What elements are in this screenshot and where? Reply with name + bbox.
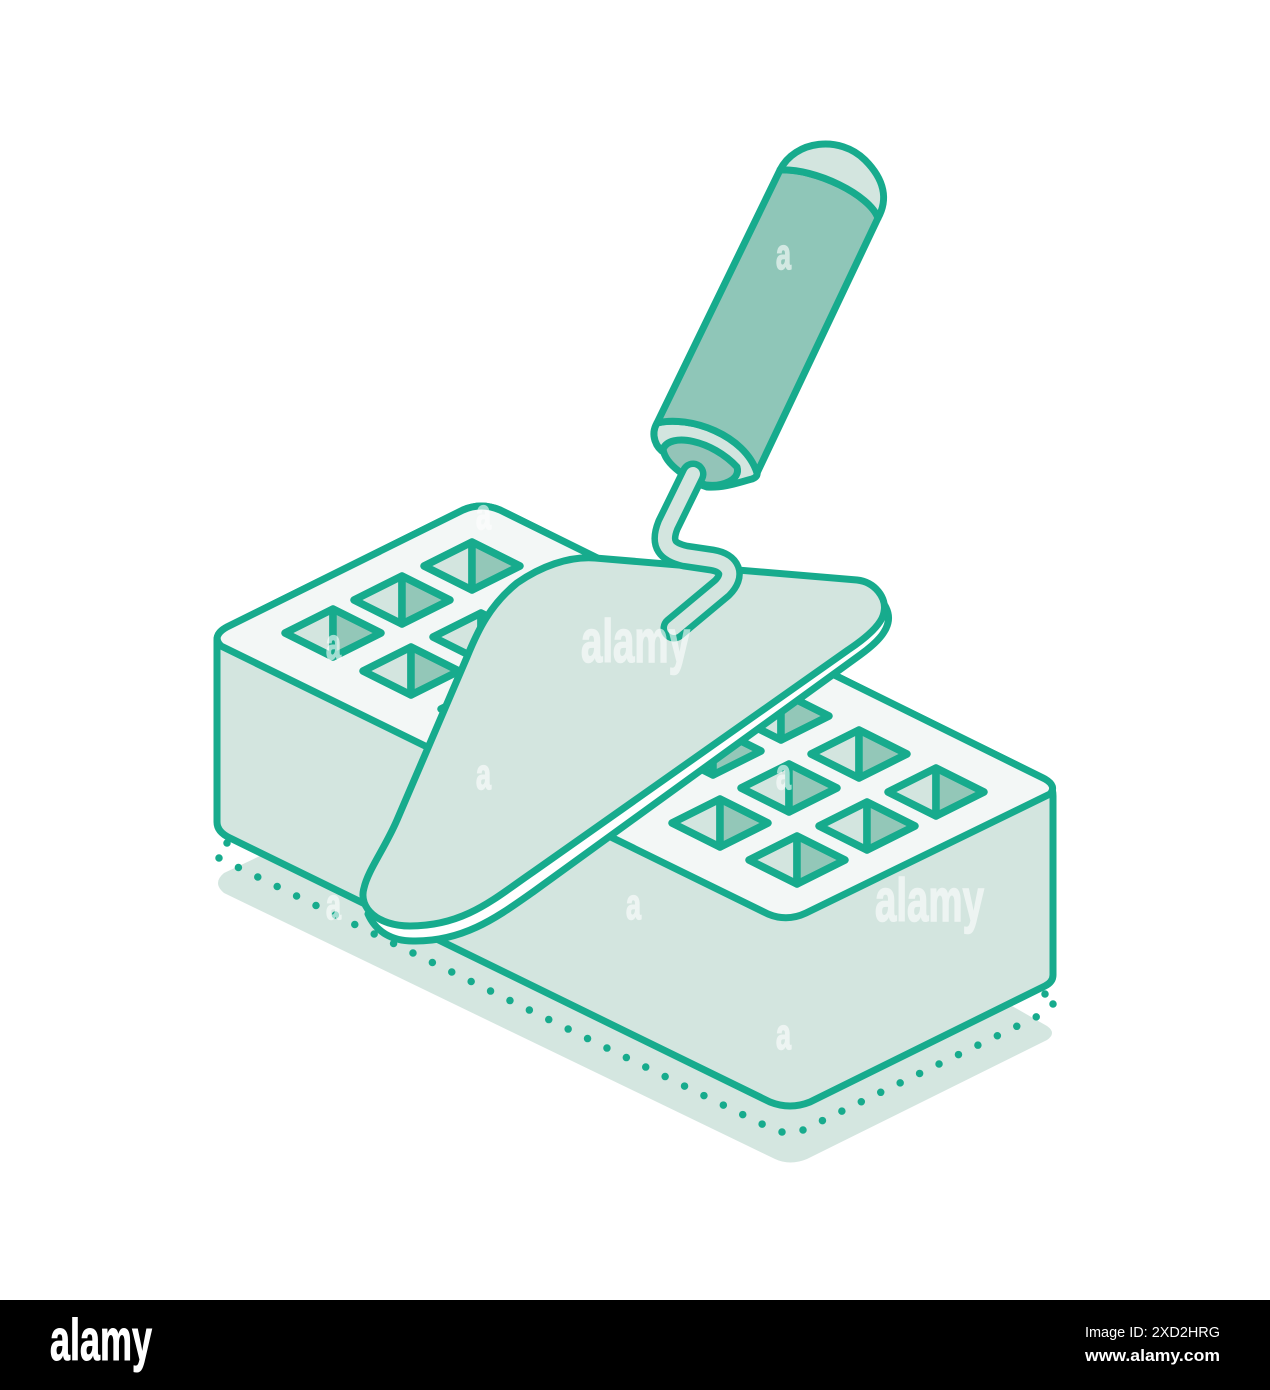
- handle collar disc: [663, 440, 738, 485]
- brick top face: [217, 506, 1053, 918]
- footer logo: alamy: [50, 1308, 152, 1373]
- blade top: [363, 558, 884, 926]
- handle grip: [657, 170, 878, 473]
- blade underside: [368, 604, 888, 941]
- watermark: brick: alamy: [875, 867, 984, 934]
- watermark: small marks: a: [476, 750, 491, 799]
- handle end cap: [780, 144, 884, 218]
- watermark: small marks: a: [776, 750, 791, 799]
- hollow brick: [217, 506, 1053, 1106]
- handle collar: [654, 421, 757, 487]
- image id: Image ID: 2XD2HRG: [1085, 1324, 1220, 1341]
- brick body: [217, 506, 1053, 1106]
- watermark: small marks: a: [326, 880, 341, 929]
- shank: [665, 474, 729, 628]
- watermarks: [326, 230, 984, 1059]
- watermark: small marks: a: [476, 490, 491, 539]
- holes: left group: [285, 542, 537, 733]
- watermark: small marks: a: [776, 230, 791, 279]
- watermark: small marks: a: [326, 620, 341, 669]
- watermark: small marks: a: [776, 1010, 791, 1059]
- ground shadow under brick: [218, 855, 1052, 1162]
- holes: right group: [665, 692, 984, 884]
- website: www.alamy.com: [1084, 1346, 1220, 1365]
- trowel: [363, 144, 888, 941]
- dotted outline on ground: [219, 843, 1053, 1132]
- watermark: small marks: a: [626, 880, 641, 929]
- watermark: blade: alamy: [581, 608, 690, 675]
- watermark: small marks: [326, 230, 791, 1059]
- footer bar: [0, 1300, 1270, 1390]
